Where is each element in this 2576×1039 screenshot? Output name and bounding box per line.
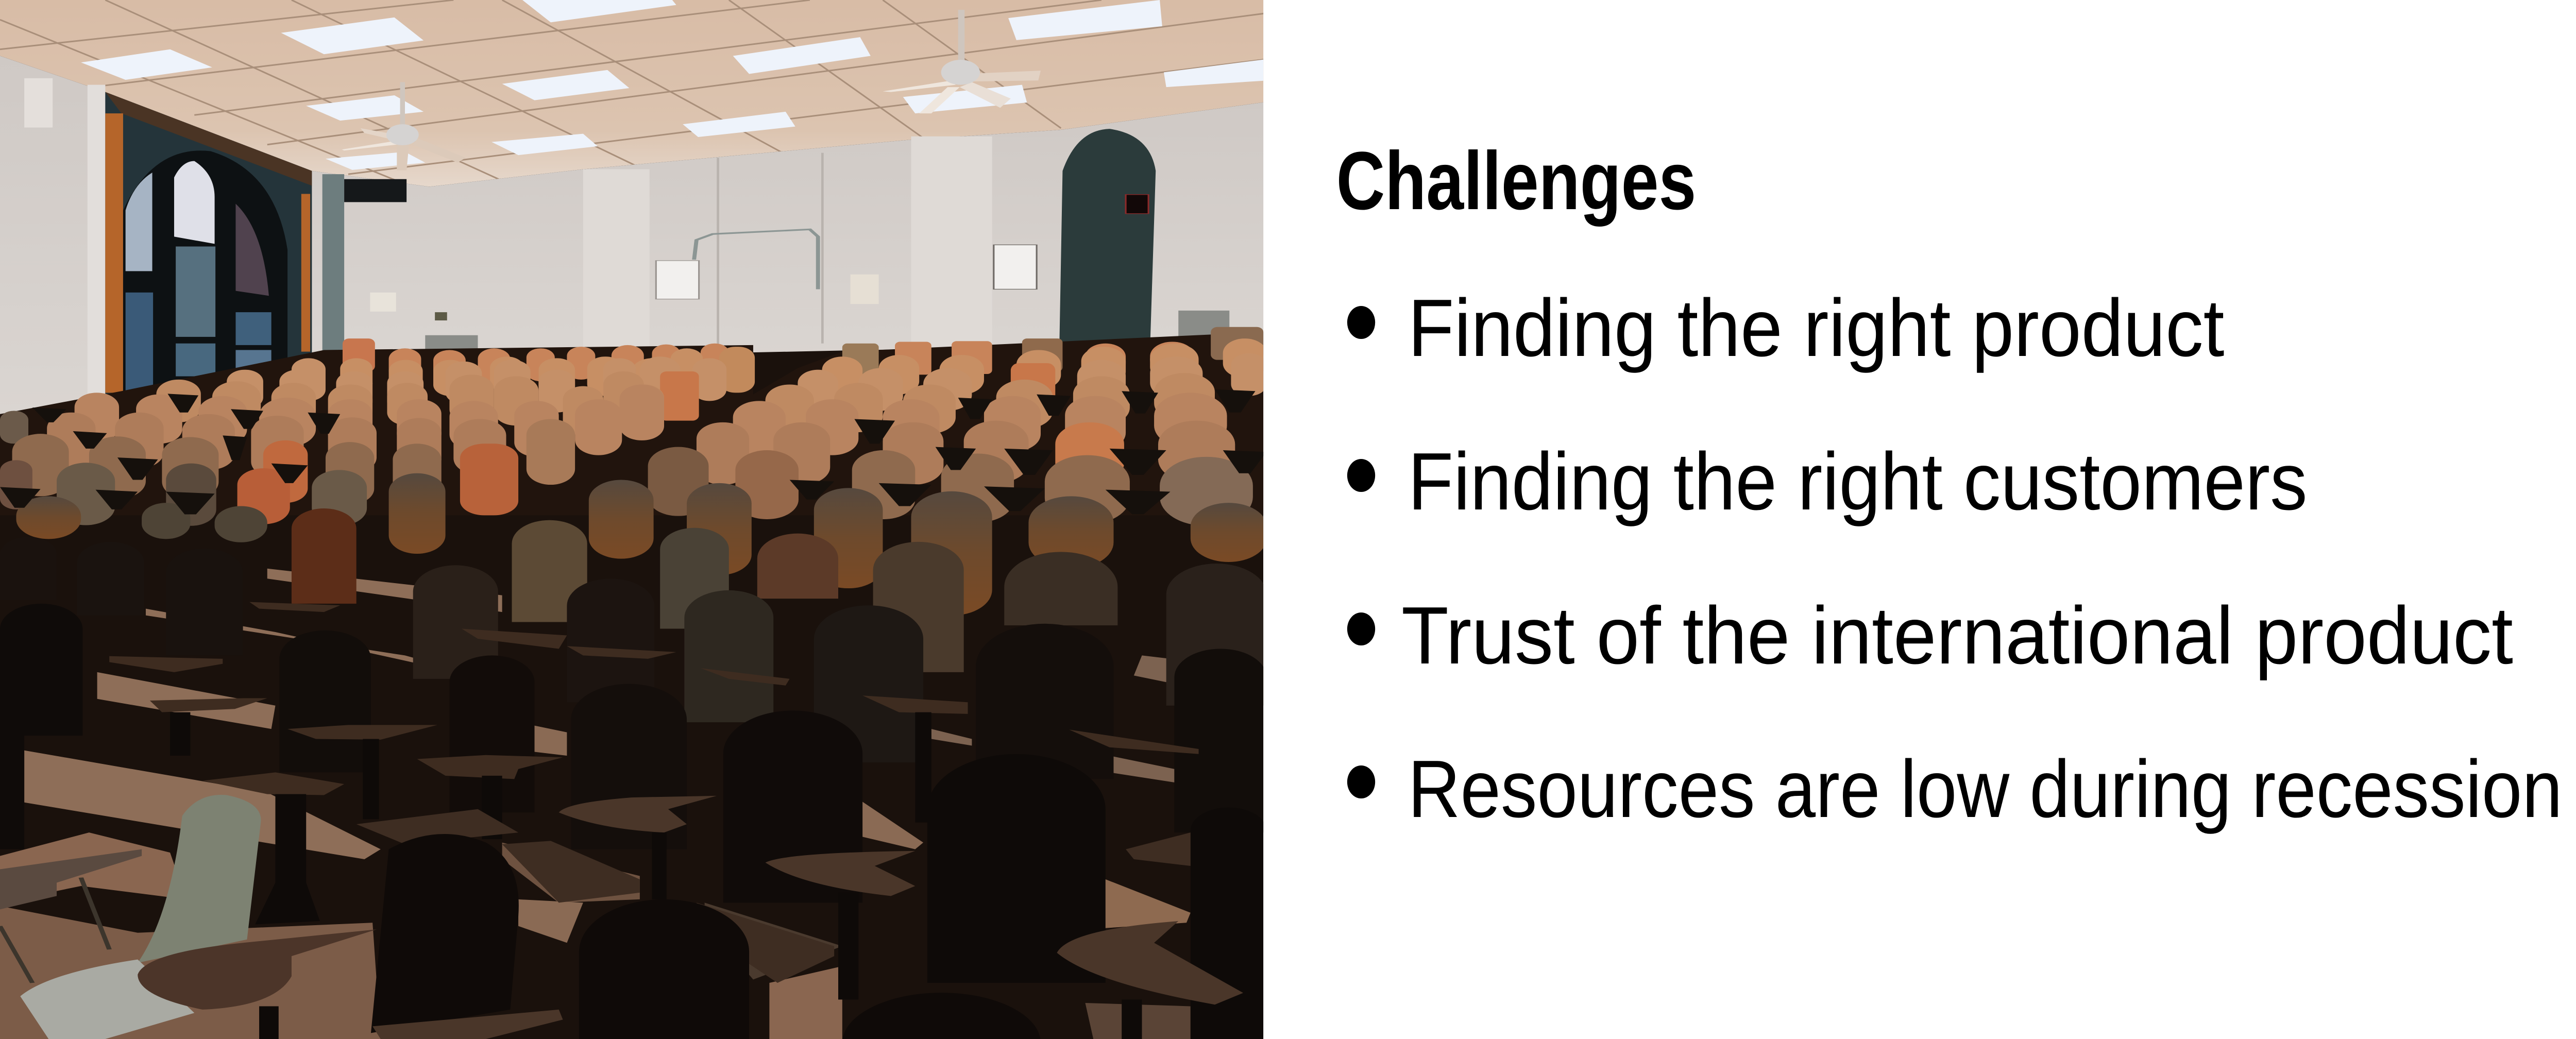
arched door with exit sign bbox=[1059, 129, 1156, 348]
bullet 3 bbox=[1347, 612, 1375, 645]
item: Finding the right customers: Finding the right customers bbox=[1408, 436, 2308, 527]
rear rows of wooden seats bbox=[0, 327, 1267, 616]
bullet 4 bbox=[1347, 765, 1375, 798]
upper part of the hall bbox=[0, 0, 1267, 616]
ceiling lights bbox=[81, 0, 1267, 170]
bullet 1 bbox=[1347, 306, 1375, 339]
item: Trust of the international product: Trust of the international product bbox=[1401, 590, 2513, 682]
bullet 2 bbox=[1347, 459, 1375, 492]
lower part of the hall bbox=[0, 508, 1267, 1039]
desk pedestals bbox=[170, 712, 931, 925]
bullet list bbox=[1347, 283, 2563, 835]
front dark seats over desks bbox=[371, 834, 1041, 1039]
panel: lecture hall photo bbox=[0, 0, 1267, 1039]
lower desks bbox=[559, 796, 1243, 1004]
dark desk funnels between seats bbox=[0, 389, 1267, 514]
front seat pans bbox=[357, 809, 1191, 983]
foreground desk bbox=[138, 929, 563, 1039]
seating backdrop bbox=[0, 332, 1267, 515]
ceiling bbox=[0, 0, 1267, 186]
item: Finding the right product: Finding the right product bbox=[1408, 283, 2224, 374]
wall boxes and conduit bbox=[370, 229, 1037, 320]
ceiling fans bbox=[342, 10, 1041, 170]
radiators bbox=[425, 311, 1229, 349]
front rows of dark seats bbox=[571, 684, 1267, 1039]
back wall bbox=[312, 102, 1267, 362]
item: Resources are low during recession: Resources are low during recession bbox=[1408, 744, 2563, 835]
middle rows of seat backs bbox=[0, 508, 1267, 849]
arched window bbox=[105, 92, 312, 407]
writing desks of the middle rows bbox=[109, 602, 1199, 795]
plastic chair in foreground bbox=[0, 795, 261, 1039]
stepped wooden floor bbox=[0, 569, 1191, 1039]
heading: Challenges: Challenges bbox=[1336, 135, 1696, 227]
desk pedestals in front bbox=[652, 832, 1142, 1039]
left wall bbox=[0, 56, 105, 414]
